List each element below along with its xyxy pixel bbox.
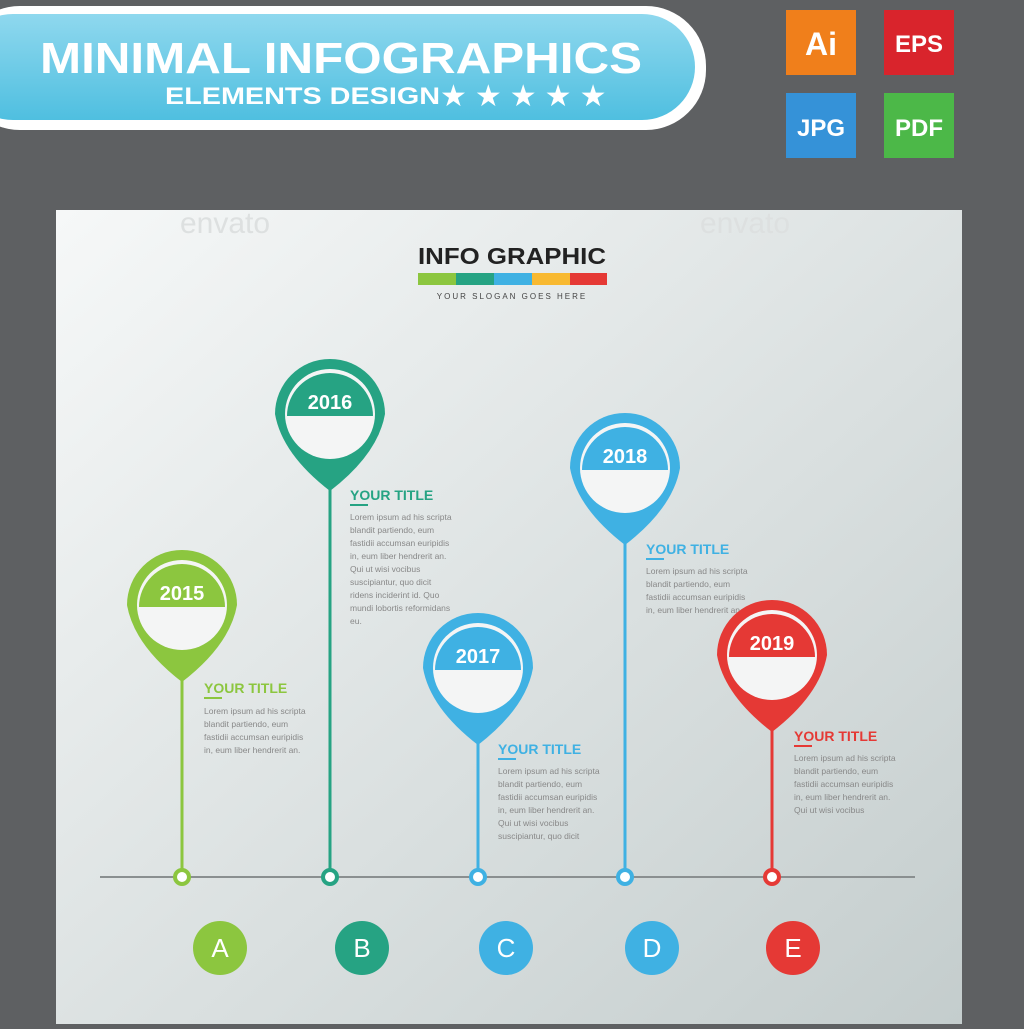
milestone 2015: in, eum liber hendrerit an.: [204, 745, 300, 755]
milestone 2016: 2016: [308, 392, 352, 414]
milestone 2018: Lorem ipsum ad his scripta: [646, 566, 748, 576]
milestone 2017: C: [497, 933, 515, 963]
milestone 2019: Qui ut wisi vocibus: [794, 805, 864, 815]
banner subtitle: ELEMENTS DESIGN: [165, 83, 440, 110]
milestone 2019: fastidii accumsan euripidis: [794, 779, 893, 789]
milestone 2016: B: [353, 933, 371, 963]
milestone 2017: 2017: [456, 646, 500, 668]
icon: PDF: PDF: [895, 115, 943, 142]
icon: JPG: JPG: [797, 115, 845, 142]
milestone 2018: blandit partiendo, eum: [646, 579, 730, 589]
timeline axis: [100, 876, 915, 878]
milestone 2019: in, eum liber hendrerit an.: [794, 792, 890, 802]
milestone 2017: in, eum liber hendrerit an.: [498, 805, 594, 815]
icon: PDF: [884, 93, 954, 158]
milestone 2019: [717, 600, 896, 975]
milestone 2016: suscipiantur, quo dicit: [350, 577, 432, 587]
milestone 2017: fastidii accumsan euripidis: [498, 792, 597, 802]
watermarks: envato: [180, 207, 270, 240]
milestone 2016: mundi lobortis reformidans: [350, 603, 450, 613]
heading: YOUR SLOGAN GOES HERE: [437, 292, 587, 301]
milestone 2018: fastidii accumsan euripidis: [646, 592, 745, 602]
milestone 2018: 2018: [603, 446, 647, 468]
milestone 2016: blandit partiendo, eum: [350, 525, 434, 535]
milestone 2019: blandit partiendo, eum: [794, 766, 878, 776]
milestone 2015: blandit partiendo, eum: [204, 719, 288, 729]
panel: [56, 207, 962, 1024]
icon: JPG: [786, 93, 856, 158]
milestone 2018: YOUR TITLE: [646, 541, 729, 557]
milestone 2017: Qui ut wisi vocibus: [498, 818, 568, 828]
heading: [418, 243, 607, 301]
milestone 2015: 2015: [160, 583, 204, 605]
milestone 2019: 2019: [750, 633, 794, 655]
milestone 2015: fastidii accumsan euripidis: [204, 732, 303, 742]
milestone 2017: Lorem ipsum ad his scripta: [498, 766, 600, 776]
milestone 2015: YOUR TITLE: [204, 680, 287, 696]
icon: EPS: EPS: [895, 31, 943, 58]
milestone 2018: [570, 413, 748, 975]
milestone 2016: ridens inciderint id. Quo: [350, 590, 440, 600]
banner title: MINIMAL INFOGRAPHICS: [40, 34, 642, 83]
banner: [0, 6, 706, 130]
milestone 2017: [423, 613, 600, 975]
milestone 2016: in, eum liber hendrerit an.: [350, 551, 446, 561]
milestone 2015: A: [211, 933, 229, 963]
milestone 2016: fastidii accumsan euripidis: [350, 538, 449, 548]
milestone 2016: eu.: [350, 616, 362, 626]
milestone 2017: suscipiantur, quo dicit: [498, 831, 580, 841]
milestone 2017: YOUR TITLE: [498, 741, 581, 757]
milestone 2015: [127, 550, 306, 975]
milestone 2018: in, eum liber hendrerit an.: [646, 605, 742, 615]
stars: ★★★★★: [440, 80, 614, 113]
milestone 2019: E: [784, 933, 802, 963]
milestone 2016: Lorem ipsum ad his scripta: [350, 512, 452, 522]
icon: Ai: [786, 10, 856, 75]
milestone 2019: YOUR TITLE: [794, 728, 877, 744]
panel: envato: [700, 207, 790, 240]
milestone 2015: Lorem ipsum ad his scripta: [204, 706, 306, 716]
milestone 2016: [275, 359, 452, 975]
milestone 2018: D: [643, 933, 661, 963]
milestone 2016: YOUR TITLE: [350, 487, 433, 503]
milestone 2017: blandit partiendo, eum: [498, 779, 582, 789]
icon: EPS: [884, 10, 954, 75]
icon: Ai: Ai: [805, 26, 837, 62]
milestone 2019: Lorem ipsum ad his scripta: [794, 753, 896, 763]
milestone 2016: Qui ut wisi vocibus: [350, 564, 420, 574]
heading: INFO GRAPHIC: [418, 243, 606, 269]
